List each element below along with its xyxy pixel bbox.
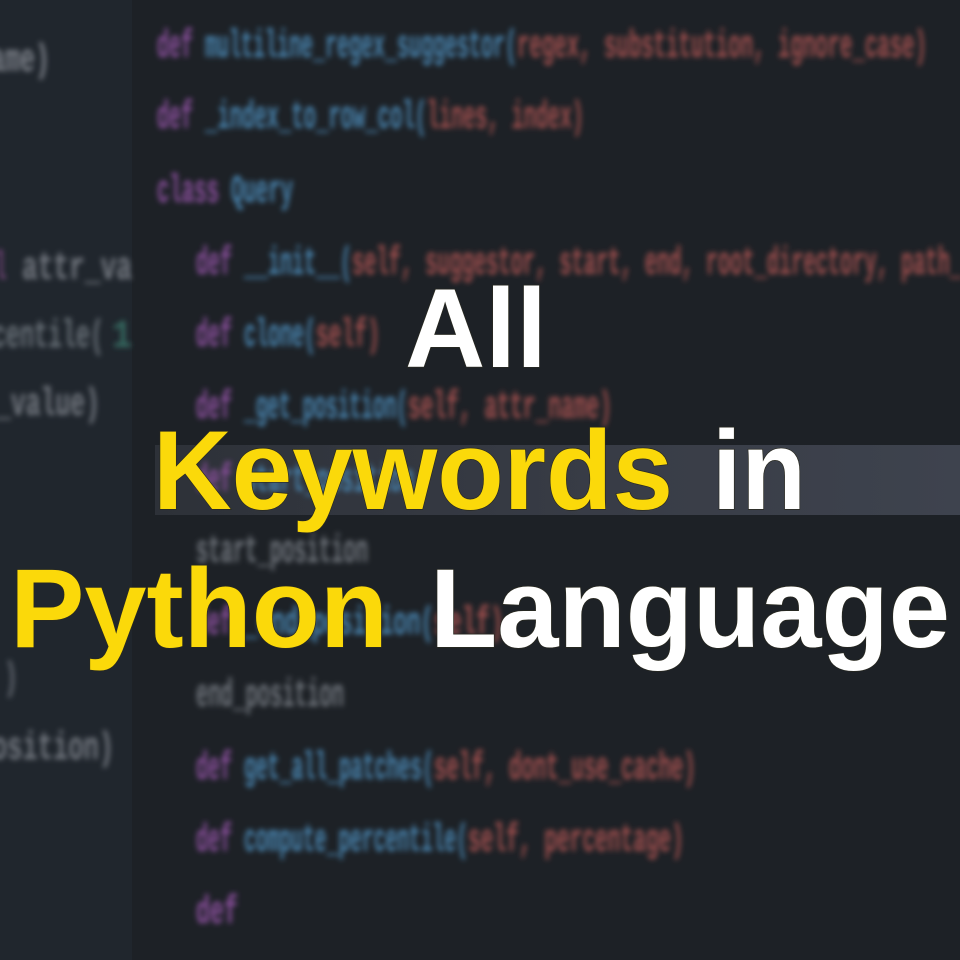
title line 2: Keywords — [153, 408, 673, 533]
blurred code: main editor lines: clone( — [244, 314, 316, 359]
blurred code: main editor lines: __init__( — [244, 242, 352, 287]
blurred code: left sidebar — [0, 39, 132, 772]
blurred code: main editor lines: def — [196, 747, 232, 792]
blurred code: left sidebar: ) — [4, 657, 18, 702]
blurred code: main editor lines: def — [196, 891, 238, 936]
blurred code: main editor lines: self, percentage) — [468, 819, 684, 864]
blurred code: main editor lines: def — [196, 602, 232, 647]
blurred code: main editor lines: end_position — [196, 674, 344, 719]
title line 1: All — [405, 266, 547, 391]
blurred code: main editor lines — [157, 25, 960, 936]
blurred code: main editor lines: get_all_patches( — [244, 747, 434, 792]
blurred code: main editor lines: _get_position( — [244, 386, 408, 431]
title line 3: Python — [10, 546, 388, 671]
title line 3 — [10, 546, 950, 671]
blurred code: main editor lines: def — [157, 96, 193, 141]
title line 3: Language — [430, 546, 950, 671]
blurred code: main editor lines: def — [196, 242, 232, 287]
blurred code: left sidebar: attr_va — [22, 247, 132, 292]
blurred code: main editor lines: def — [196, 819, 232, 864]
blurred code: left sidebar: _value) — [0, 383, 100, 428]
blurred code: main editor lines: start_position — [196, 530, 368, 575]
blurred code: main editor lines: self, attr_name) — [408, 386, 612, 431]
blurred code: main editor lines: multiline_regex_suggestor( — [205, 25, 517, 70]
highlighted code line band — [155, 445, 960, 515]
blurred code: main editor lines: self) — [316, 314, 380, 359]
blurred code: main editor lines: Query — [231, 170, 293, 215]
blurred code: main editor lines: def — [196, 459, 232, 504]
blurred code: main editor lines: def — [196, 386, 232, 431]
panel: left editor sidebar — [0, 0, 132, 960]
blurred code: main editor lines: def — [157, 25, 193, 70]
blurred code: main editor lines: compute_percentile( — [244, 819, 468, 864]
blurred code: main editor lines: self) — [434, 602, 504, 647]
title — [10, 266, 950, 671]
blurred code: main editor lines: _index_to_row_col( — [204, 96, 427, 141]
blurred code: left sidebar: 1 — [112, 315, 132, 360]
blurred code: main editor lines: class — [157, 170, 219, 215]
blurred code: main editor lines: start_position — [244, 459, 414, 504]
blurred code: main editor lines: self, dont_use_cache) — [434, 747, 696, 792]
blurred code: main editor lines: lines, index) — [427, 96, 584, 141]
blurred code: main editor lines: _end_position( — [243, 602, 434, 647]
blurred code: main editor lines: def — [196, 314, 232, 359]
title line 2: in — [712, 408, 806, 533]
